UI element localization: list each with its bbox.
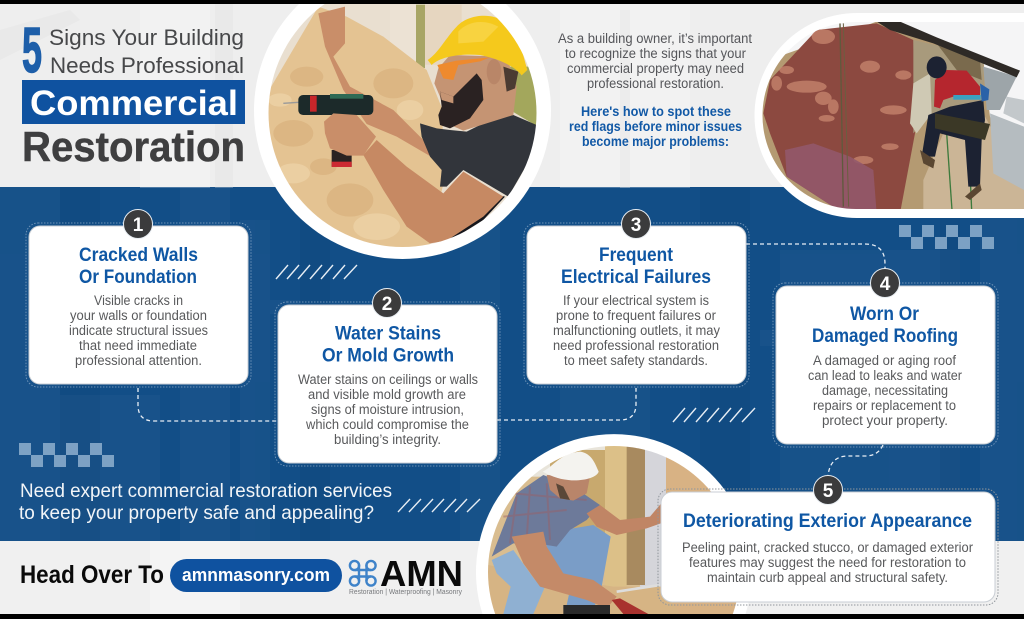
intro text: As a building owner, it’s important bbox=[558, 31, 752, 46]
card 3 text: malfunctioning outlets, it may bbox=[553, 323, 720, 338]
card 1 text bbox=[69, 293, 208, 368]
badge 5: 5 bbox=[823, 481, 834, 502]
card 3 text: If your electrical system is bbox=[563, 293, 709, 308]
card 4 title: Damaged Roofing bbox=[812, 325, 958, 347]
card 3 text: prone to frequent failures or bbox=[556, 308, 716, 323]
card 2 title: Water Stains bbox=[335, 322, 441, 344]
card 2 text: and visible mold growth are bbox=[308, 387, 466, 402]
badge 5 bbox=[814, 476, 842, 504]
card 4 title: Worn Or bbox=[850, 303, 919, 325]
checker pattern right bbox=[899, 225, 994, 249]
hatch mark upper bbox=[276, 265, 357, 279]
card 3 title: Electrical Failures bbox=[561, 266, 711, 288]
intro highlight: Here's how to spot these bbox=[581, 104, 731, 119]
card 1 text: indicate structural issues bbox=[69, 323, 208, 338]
card 2 title bbox=[322, 322, 454, 366]
icon: logo symbol bbox=[350, 561, 376, 586]
card 1 title: Or Foundation bbox=[79, 266, 197, 288]
badge 4 bbox=[870, 268, 900, 298]
card 2 text: building’s integrity. bbox=[334, 432, 441, 447]
card 2 text: signs of moisture intrusion, bbox=[311, 402, 464, 417]
card 3 text: to meet safety standards. bbox=[564, 353, 708, 368]
AMN logo: Restoration | Waterproofing | Masonry bbox=[349, 587, 462, 596]
card 4 text: A damaged or aging roof bbox=[813, 353, 956, 368]
card 2 text: Water stains on ceilings or walls bbox=[298, 372, 478, 387]
call to action text: Need expert commercial restoration services bbox=[20, 480, 392, 502]
call to action text: to keep your property safe and appealing? bbox=[19, 502, 374, 524]
card 1: cracked walls bbox=[26, 210, 251, 387]
heading bbox=[22, 14, 245, 170]
card 1 title bbox=[79, 244, 198, 288]
badge 4: 4 bbox=[880, 274, 891, 295]
card 3 text: need professional restoration bbox=[553, 338, 719, 353]
photo: climber repairing wall bbox=[750, 0, 1024, 220]
card 2: water stains bbox=[275, 288, 500, 466]
card 1 text: your walls or foundation bbox=[70, 308, 207, 323]
website pill bbox=[170, 559, 342, 592]
badge 3: 3 bbox=[631, 215, 641, 236]
intro highlight bbox=[569, 104, 742, 149]
card 4 text bbox=[808, 353, 962, 428]
photo: worker with drill bbox=[250, 0, 551, 260]
AMN logo bbox=[349, 553, 463, 596]
checker pattern left bbox=[19, 443, 114, 467]
badge 2 bbox=[372, 288, 402, 318]
intro text: to recognize the signs that your bbox=[565, 46, 746, 61]
heading: restoration: Restoration bbox=[22, 123, 245, 170]
call to action text bbox=[19, 480, 392, 524]
website pill: amnmasonry.com bbox=[182, 565, 330, 585]
badge 3 bbox=[622, 210, 650, 238]
card 5 text: Peeling paint, cracked stucco, or damaged exterior bbox=[682, 540, 973, 555]
AMN logo: AMN bbox=[380, 553, 463, 594]
heading: commercial band: Commercial bbox=[30, 84, 238, 123]
badge 2: 2 bbox=[382, 294, 392, 315]
card 4: damaged roofing bbox=[773, 268, 998, 447]
card 4 text: can lead to leaks and water bbox=[808, 368, 962, 383]
hatch mark lower bbox=[398, 499, 480, 512]
intro text: professional restoration. bbox=[587, 76, 724, 91]
numeral 5: 5 bbox=[22, 14, 42, 86]
card 5 title: Deteriorating Exterior Appearance bbox=[683, 510, 972, 532]
badge 1: 1 bbox=[133, 215, 144, 236]
card 4 text: protect your property. bbox=[822, 413, 948, 428]
card 4 text: repairs or replacement to bbox=[813, 398, 956, 413]
intro text: commercial property may need bbox=[567, 61, 744, 76]
heading line: signs bbox=[49, 25, 244, 78]
card 5 text bbox=[682, 540, 973, 585]
card 3 text bbox=[553, 293, 720, 368]
card 3 title bbox=[561, 244, 711, 288]
card 1 title: Cracked Walls bbox=[79, 244, 198, 266]
heading line: signs: Signs Your Building bbox=[49, 25, 244, 50]
intro text bbox=[558, 31, 752, 149]
card 5 text: features may suggest the need for restoration to bbox=[689, 555, 966, 570]
badge 1 bbox=[124, 210, 152, 238]
card 1 text: professional attention. bbox=[75, 353, 202, 368]
card 5 text: maintain curb appeal and structural safety. bbox=[707, 570, 948, 585]
connector lines bbox=[138, 244, 885, 476]
head over to: Head Over To bbox=[20, 561, 164, 589]
card 3: electrical failures bbox=[524, 210, 749, 387]
card 5: exterior appearance bbox=[658, 476, 998, 605]
card 1 text: that need immediate bbox=[79, 338, 197, 353]
card 4 title bbox=[812, 303, 958, 347]
heading line: signs: Needs Professional bbox=[50, 53, 244, 78]
photo: worker crouching bbox=[476, 430, 752, 614]
hatch mark middle bbox=[673, 408, 755, 422]
card 1 text: Visible cracks in bbox=[94, 293, 183, 308]
intro highlight: become major problems: bbox=[582, 134, 729, 149]
card 2 text: which could compromise the bbox=[305, 417, 469, 432]
card 2 title: Or Mold Growth bbox=[322, 344, 454, 366]
card 2 text bbox=[298, 372, 478, 447]
intro highlight: red flags before minor issues bbox=[569, 119, 742, 134]
card 3 title: Frequent bbox=[599, 244, 673, 266]
card 4 text: damage, necessitating bbox=[822, 383, 948, 398]
